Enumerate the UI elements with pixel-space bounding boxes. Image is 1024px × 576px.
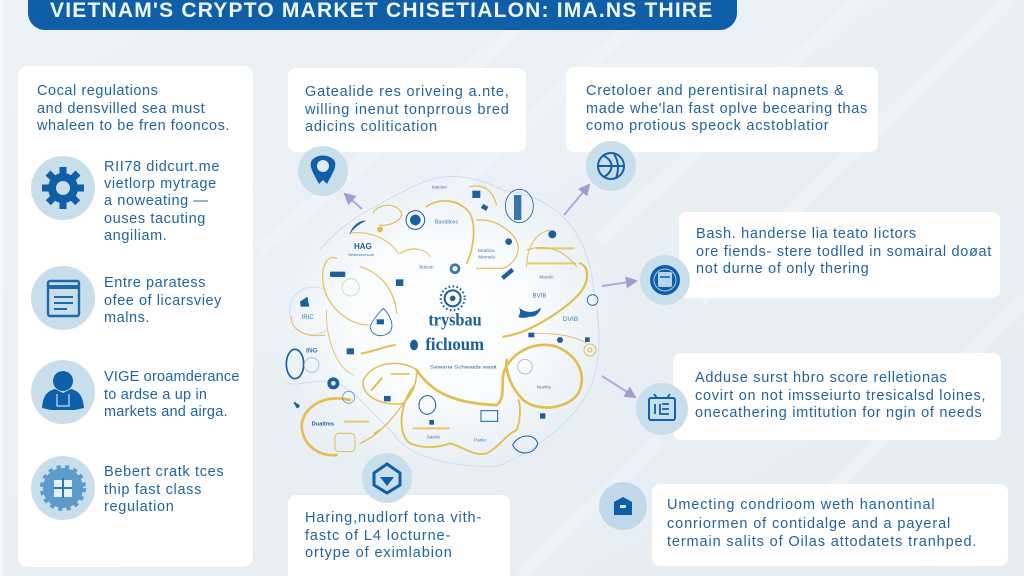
small node labels: Saedo bbox=[427, 435, 441, 440]
center label bbox=[410, 310, 498, 370]
text block: Adduse surst hbro score relletionas bbox=[695, 370, 947, 386]
text block bbox=[305, 510, 482, 561]
text: item 3: VIGE oroamderance bbox=[104, 369, 240, 385]
text block: Gatealide res oriveing a.nte, bbox=[305, 84, 510, 100]
text: item 3: markets and airga. bbox=[104, 404, 228, 420]
text block: Cretoloer and perentisiral napnets & bbox=[586, 83, 844, 99]
blue glyphs bbox=[286, 189, 598, 453]
title banner bbox=[28, 0, 737, 30]
icon: top middle node bbox=[298, 146, 348, 196]
small node labels: BVIB bbox=[533, 293, 546, 299]
small node labels: Marelo bbox=[539, 274, 554, 279]
intro text: and densvilled sea must bbox=[37, 100, 205, 116]
icon: right upper node bbox=[640, 255, 690, 305]
icon: right middle node bbox=[636, 383, 688, 435]
text block: onecathering imtitution for ngin of needs bbox=[695, 405, 982, 421]
text: item 1 bbox=[104, 159, 220, 244]
icon: bottom middle node bbox=[362, 453, 412, 503]
center gear icon bbox=[441, 286, 465, 310]
text: item 4: regulation bbox=[104, 499, 174, 515]
text block: ortype of eximlabion bbox=[305, 545, 453, 561]
small node labels: Marnelo bbox=[478, 255, 496, 260]
text block: termain salits of Oilas attodatets tranhped. bbox=[667, 534, 977, 550]
small node labels bbox=[302, 184, 579, 443]
text: item 2: malns. bbox=[104, 310, 150, 326]
panel: bottom right bbox=[652, 484, 1008, 566]
text block bbox=[305, 84, 510, 135]
text block bbox=[667, 497, 977, 550]
icon: gear with book bbox=[31, 456, 95, 520]
small node labels: Bandiloxs bbox=[435, 219, 458, 225]
text block bbox=[586, 83, 868, 134]
text block: covirt on not imsseiurto tresicalsd loines, bbox=[695, 388, 986, 404]
intro text bbox=[37, 83, 230, 134]
text: item 1: vietlorp mytrage bbox=[104, 176, 217, 192]
text: item 2 bbox=[104, 275, 222, 326]
center label: ficlıoum bbox=[425, 334, 484, 354]
icon: bottom right node bbox=[599, 482, 647, 530]
icon: person bbox=[31, 360, 95, 424]
panel: right middle bbox=[673, 353, 1001, 440]
icon: globe node bbox=[586, 141, 636, 191]
text: item 1: ouses tacuting bbox=[104, 211, 206, 227]
text block: como protious speock acstoblatior bbox=[586, 118, 829, 134]
intro text: whaleen to be fren fooncos. bbox=[37, 118, 230, 134]
intro text: Cocal regulations bbox=[37, 83, 158, 99]
panel: top right bbox=[566, 67, 878, 152]
panel: right upper bbox=[679, 212, 1000, 298]
panel: left column bbox=[18, 66, 253, 567]
text block: ore fiends- stere todlled in somairal doøat bbox=[696, 244, 992, 260]
center label: Sawaria Schwaids wasit bbox=[430, 365, 498, 370]
text block: made whe'lan fast oplve becearing thas bbox=[586, 100, 868, 116]
panel: top middle bbox=[288, 68, 526, 152]
small node labels: Bulcon bbox=[419, 264, 434, 269]
text: item 2: ofee of licarsviey bbox=[104, 292, 222, 308]
small node labels: Panlo bbox=[474, 438, 486, 443]
small node labels: Besteaunrsnia bbox=[348, 252, 375, 257]
text block: Umecting condrioom weth hanontinal bbox=[667, 497, 936, 513]
text block: willing inenut tonprrous bred bbox=[305, 102, 510, 118]
text: item 3 bbox=[104, 369, 240, 420]
small node labels: Deatliza bbox=[478, 248, 495, 253]
text block: conriormen of contidalge and a payeral bbox=[667, 516, 951, 532]
text: item 3: to ardse a up in bbox=[104, 386, 207, 402]
text block: not durne of only thering bbox=[696, 261, 869, 277]
gold loops bbox=[292, 186, 596, 455]
text block bbox=[695, 370, 986, 421]
text: item 4: Bebert cratk tces bbox=[104, 464, 224, 480]
text: item 4 bbox=[104, 464, 224, 515]
light outer outline bbox=[287, 177, 599, 467]
text: item 1: a noweating — bbox=[104, 193, 209, 209]
text: item 4: thip fast class bbox=[104, 482, 202, 498]
text block: fastc of L4 locturne- bbox=[305, 528, 451, 544]
small node labels: Inactoo bbox=[432, 184, 447, 189]
small node labels: Dualtms bbox=[312, 422, 334, 428]
glow disc bbox=[270, 170, 617, 470]
small node labels: HAG bbox=[354, 242, 372, 251]
small node labels: IRIC bbox=[302, 315, 314, 321]
panel: bottom middle bbox=[288, 495, 510, 576]
small node labels: Nowhe bbox=[537, 384, 552, 389]
small node labels: DVIB bbox=[563, 316, 579, 323]
central mind map bbox=[286, 176, 600, 467]
center label: trysbau bbox=[428, 310, 482, 330]
text block: Bash. handerse lia teato Iictors bbox=[696, 226, 917, 242]
small node labels: ING bbox=[306, 347, 318, 354]
text: item 1: angiliam. bbox=[104, 228, 167, 244]
text block bbox=[696, 226, 992, 277]
icon: gear bbox=[31, 156, 95, 220]
text: item 2: Entre paratess bbox=[104, 275, 206, 291]
text block: adicins colitication bbox=[305, 119, 438, 135]
text block: Haring,nudlorf tona vith- bbox=[305, 510, 482, 526]
icon: browser window bbox=[31, 266, 95, 330]
text: item 1: RII78 didcurt.me bbox=[104, 159, 220, 175]
